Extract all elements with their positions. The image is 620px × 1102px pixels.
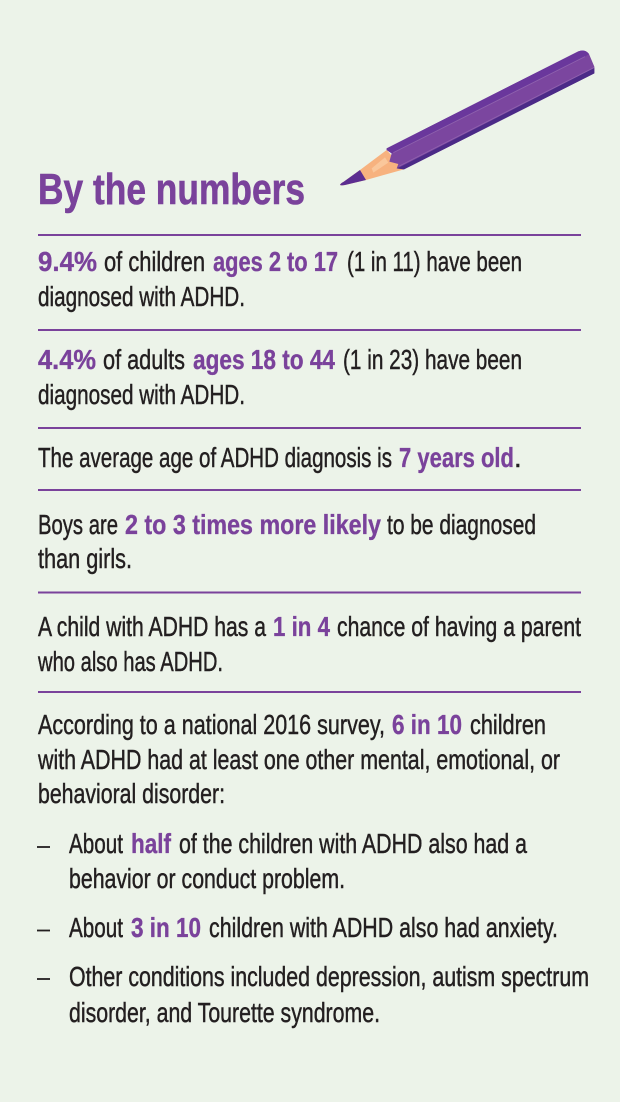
fact: boys versus girls: to be diagnosed <box>387 509 536 540</box>
fact: children diagnosed: (1 in 11) have been <box>347 246 522 277</box>
icon: purple pencil <box>340 50 594 185</box>
fact: national 2016 survey: children <box>470 709 546 740</box>
fact: boys versus girls: than girls. <box>38 543 132 574</box>
fact: national 2016 survey: According to a national 2016 survey, <box>38 709 385 740</box>
fact: adults diagnosed: diagnosed with ADHD. <box>38 379 245 410</box>
fact: parent with ADHD: 1 in 4 <box>273 611 331 642</box>
bullet: behavior or conduct problem: behavior or conduct problem. <box>69 863 345 894</box>
fact: boys versus girls: Boys are <box>38 509 118 540</box>
fact: average age of diagnosis: The average age of ADHD diagnosis is <box>38 442 392 473</box>
fact: children diagnosed: 9.4% <box>38 246 97 277</box>
fact: adults diagnosed: 4.4% <box>38 344 96 375</box>
fact: boys versus girls: 2 to 3 times more likely <box>125 509 382 540</box>
fact: average age of diagnosis: 7 years old <box>399 442 514 473</box>
fact: boys versus girls <box>38 509 536 574</box>
bullet: other conditions <box>37 961 589 1028</box>
bullet: anxiety: 3 in 10 <box>131 912 201 943</box>
bullet: anxiety <box>37 912 558 943</box>
fact: adults diagnosed: (1 in 23) have been <box>343 344 522 375</box>
fact: adults diagnosed: of adults <box>103 344 185 375</box>
bullet: behavior or conduct problem: of the children with ADHD also had a <box>179 828 528 859</box>
bullet: anxiety: About <box>69 912 123 943</box>
bullet: behavior or conduct problem: half <box>131 828 172 859</box>
bullet: behavior or conduct problem: About <box>69 828 123 859</box>
fact: adults diagnosed <box>38 344 522 410</box>
title: By the numbers <box>38 165 305 214</box>
fact: parent with ADHD: who also has ADHD. <box>37 646 223 677</box>
fact: national 2016 survey <box>37 709 560 809</box>
fact: children diagnosed: diagnosed with ADHD. <box>38 281 245 312</box>
fact: national 2016 survey: 6 in 10 <box>392 709 462 740</box>
bullet: behavior or conduct problem <box>37 828 528 894</box>
fact: children diagnosed: ages 2 to 17 <box>213 246 338 277</box>
fact: national 2016 survey: behavioral disorder: <box>38 778 225 809</box>
fact: children diagnosed <box>38 246 522 312</box>
fact: children diagnosed: of children <box>104 246 205 277</box>
fact: parent with ADHD <box>37 611 581 677</box>
fact: average age of diagnosis: . <box>514 442 522 473</box>
fact: parent with ADHD: A child with ADHD has a <box>38 611 267 642</box>
fact: adults diagnosed: ages 18 to 44 <box>193 344 336 375</box>
bullet: other conditions: disorder, and Tourette syndrome. <box>69 997 380 1028</box>
